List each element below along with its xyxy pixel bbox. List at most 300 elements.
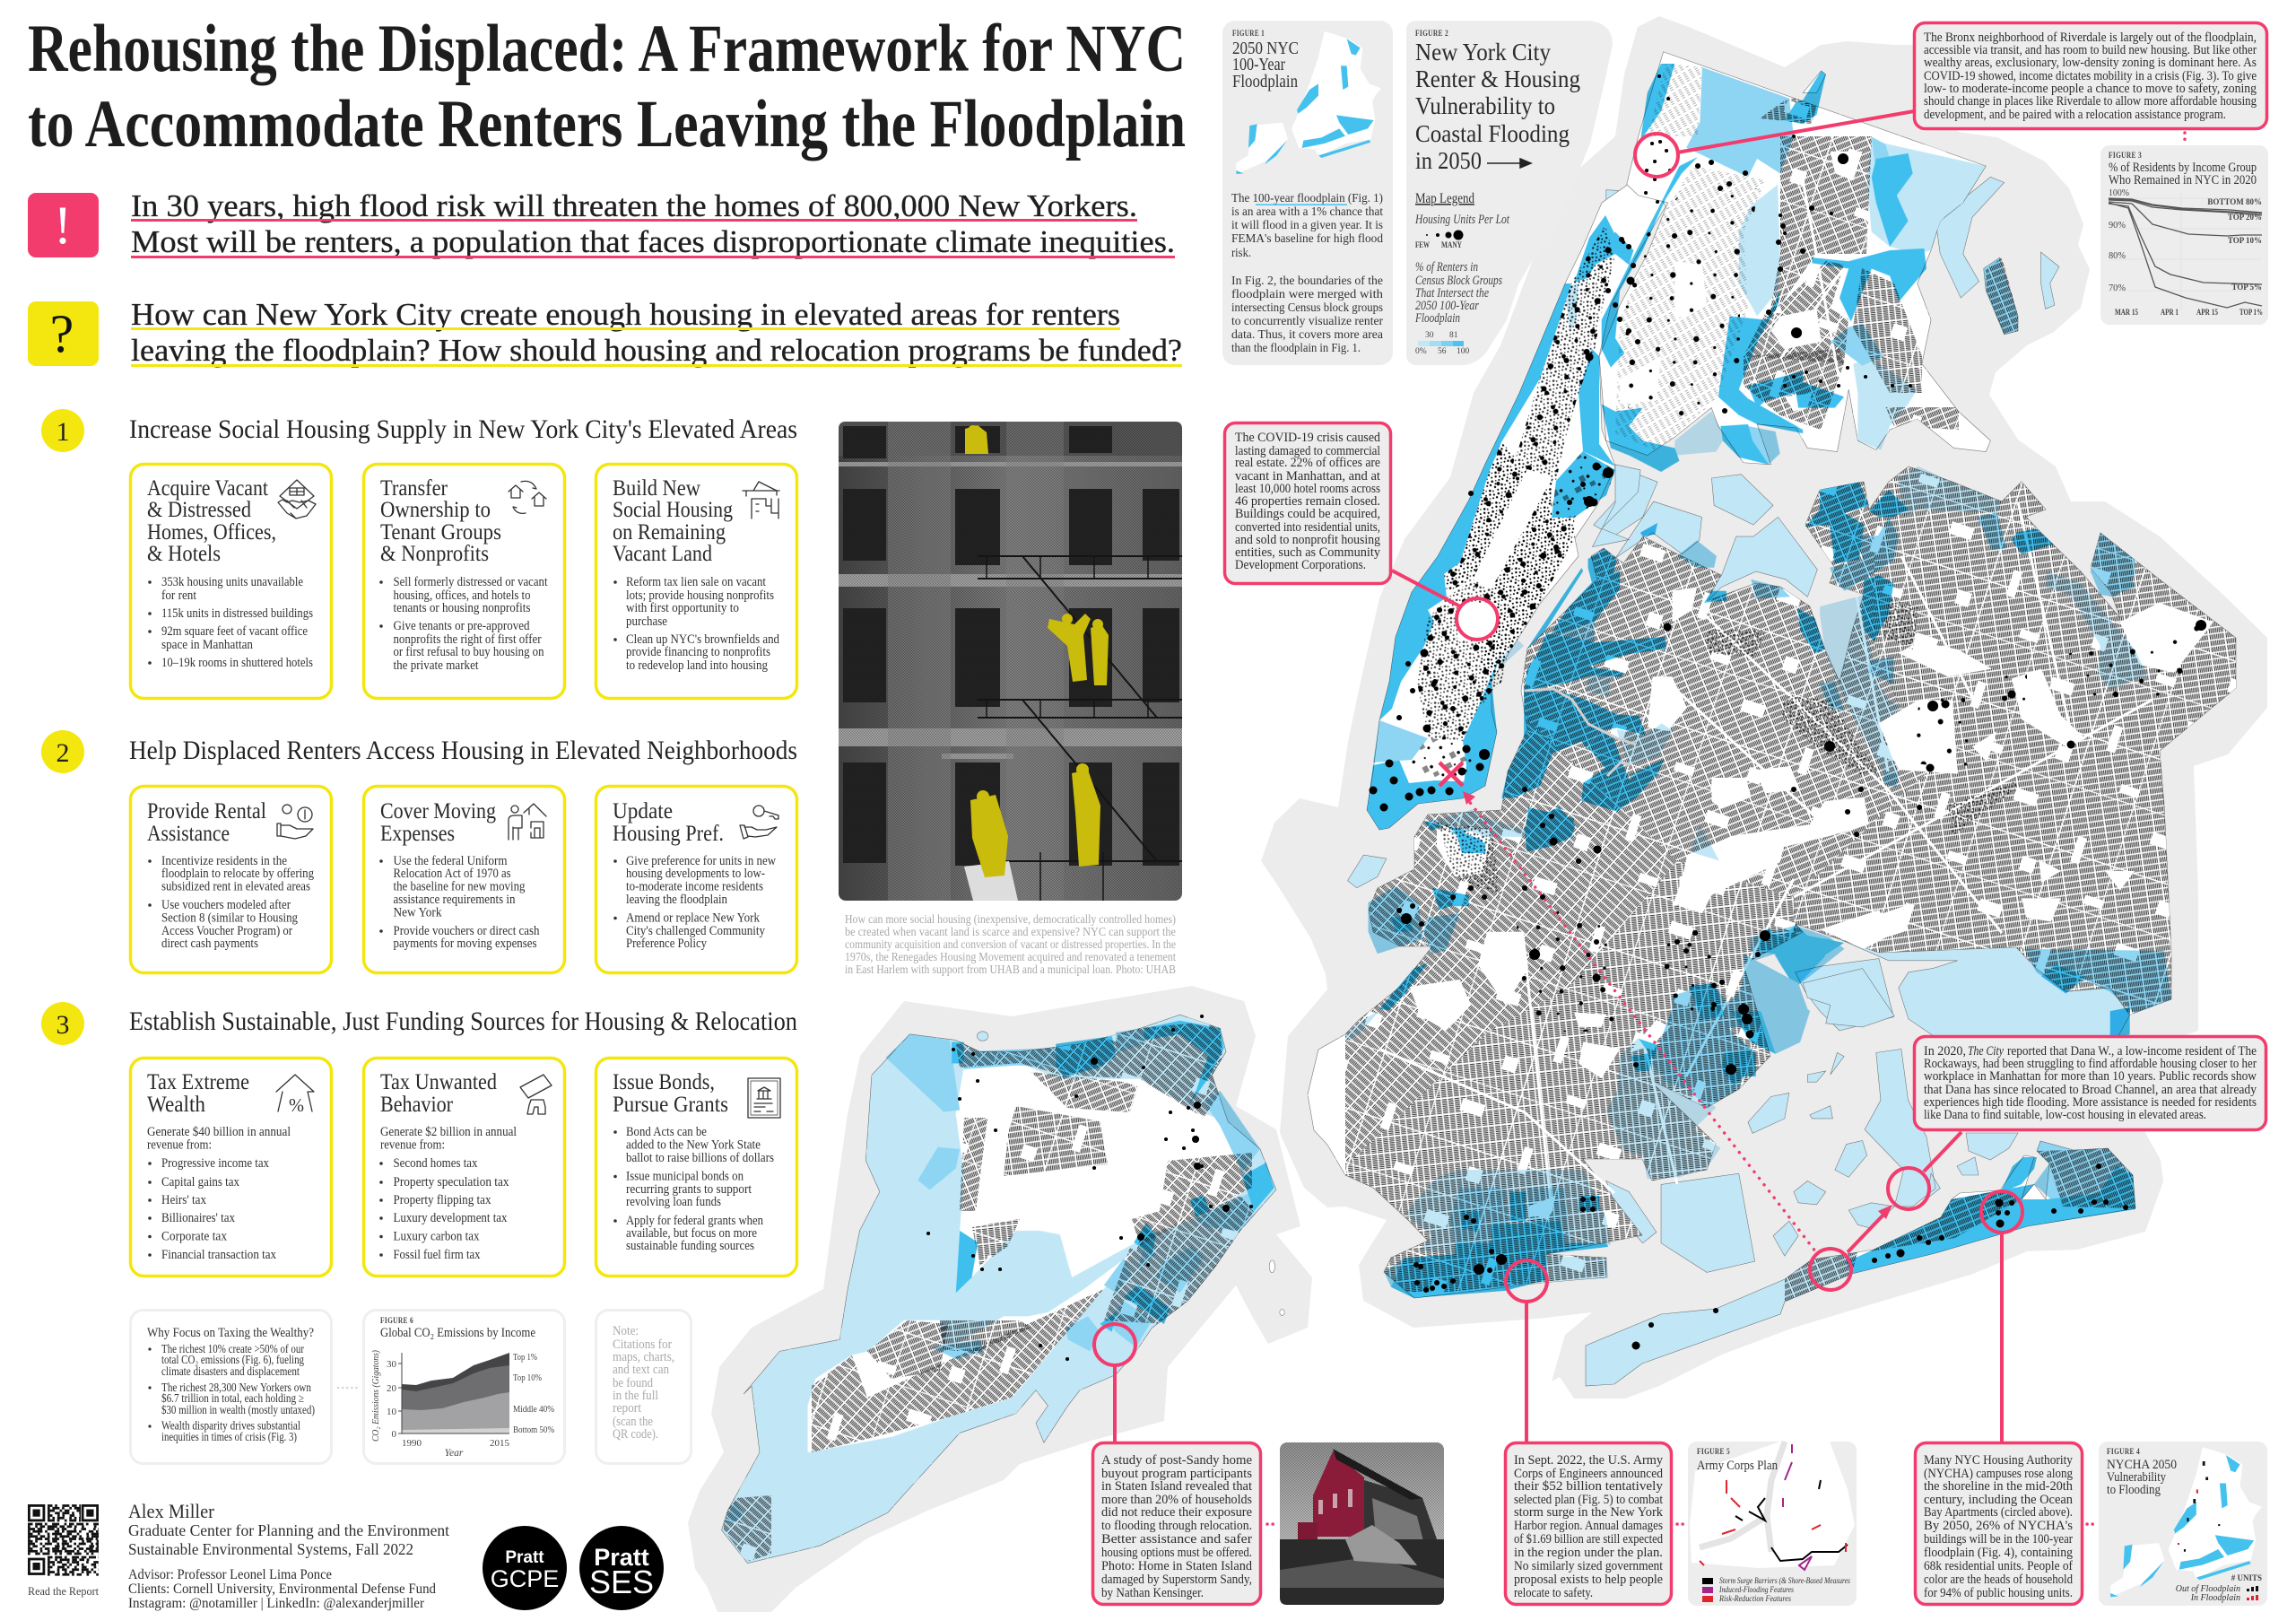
- icon: exchanging houses: [509, 481, 546, 513]
- callout: covid commercial real estate: and sold to nonprofit housing: [1235, 533, 1380, 547]
- icon: percent arrow: [276, 1075, 314, 1111]
- map legend: 30: [1425, 331, 1434, 340]
- callout: Army Corps plan: selected plan (Fig. 5) to combat: [1514, 1493, 1664, 1507]
- callout: NYCHA campuses: color are the heads of household: [1924, 1573, 2073, 1587]
- callout: Staten Island buyout: by Nathan Kensinger.: [1101, 1586, 1204, 1600]
- panel: figure 1 floodplain: 2050 NYC: [1232, 39, 1299, 58]
- map legend: 0%: [1415, 347, 1427, 356]
- callout: Army Corps plan: [1505, 1442, 1672, 1604]
- line chart: BOTTOM 80%: [2207, 197, 2262, 206]
- panel: figure 4 NYCHA: Vulnerability: [2107, 1470, 2166, 1485]
- area chart: 10: [387, 1407, 396, 1417]
- panel: why tax the wealthy: Wealth disparity drives substantial: [161, 1419, 300, 1432]
- riverdale marker and connector: [1635, 111, 1914, 177]
- map: building block texture: [718, 64, 2242, 1570]
- panel: figure 5 Army Corps plan: Risk-Reduction Features: [1718, 1595, 1791, 1604]
- section 3 heading: Establish Sustainable, Just Funding Sources for Housing & Relocation: [129, 1006, 797, 1036]
- card: tax unwanted behavior: Tax Unwanted: [380, 1070, 497, 1094]
- logo: Pratt GCPE: Pratt: [505, 1548, 544, 1567]
- callout: NYCHA campuses: By 2050, 26% of NYCHA's: [1924, 1519, 2073, 1533]
- panel: figure 1 floodplain: risk.: [1231, 246, 1251, 259]
- area chart: Middle 40%: [513, 1405, 554, 1415]
- statement: research question: How can New York City create enough housing in elevated areas for renters: [131, 297, 1120, 332]
- map legend: Floodplain: [1414, 311, 1460, 326]
- connector dots to figure 3: [2183, 133, 2187, 142]
- card: housing preference: Preference Policy: [626, 937, 708, 951]
- card: build new social housing: on Remaining: [613, 520, 726, 545]
- callout: NYCHA campuses: Many NYC Housing Authority: [1924, 1453, 2073, 1468]
- icon: exclamation badge: [28, 193, 99, 257]
- Staten Island flood shading: [722, 1015, 1276, 1564]
- card: tax extreme wealth: [131, 1059, 332, 1276]
- panel: figure 1 floodplain: Floodplain: [1232, 72, 1298, 91]
- title: Rehousing the Displaced: A Framework for NYC: [28, 12, 1186, 86]
- map legend: That Intersect the: [1415, 286, 1489, 301]
- card: acquire vacant: & Distressed: [147, 498, 251, 522]
- card: bonds and grants: Issue municipal bonds on: [626, 1170, 744, 1184]
- card: housing preference: Give preference for units in new: [626, 854, 776, 868]
- icon: crane and building: [743, 482, 779, 518]
- callout: Army Corps plan: No similarly sized government: [1514, 1559, 1664, 1573]
- card: housing preference: City's challenged Community: [626, 924, 766, 938]
- card: build new social housing: to redevelop land into housing: [626, 658, 768, 673]
- panel: figure 4 NYCHA: NYCHA 2050: [2107, 1458, 2177, 1472]
- map: parks and roads: [1381, 152, 2213, 1217]
- panel: figure 1 floodplain: floodplain were merged with: [1231, 287, 1383, 301]
- card: tax extreme wealth: Corporate tax: [161, 1229, 228, 1243]
- author credits: Advisor: Professor Leonel Lima Ponce: [128, 1567, 332, 1582]
- callout: Army Corps plan: In Sept. 2022, the U.S. Army: [1514, 1453, 1663, 1468]
- south Brooklyn flood shading: [1345, 807, 1844, 1298]
- panel: figure 2 title and legend: FIGURE 2: [1415, 29, 1448, 38]
- Rockaway markers and connectors: [1810, 1132, 2022, 1442]
- card: rental assistance: Provide Rental: [147, 799, 266, 823]
- map legend: 56: [1438, 347, 1447, 356]
- area chart: Top 10%: [513, 1373, 542, 1383]
- callout: Army Corps plan: their $52 billion tentatively: [1514, 1479, 1664, 1494]
- author credits: Alex Miller: [128, 1500, 215, 1522]
- card: bonds and grants: Pursue Grants: [613, 1093, 728, 1117]
- photo caption: in East Harlem with support from UHAB and a municipal loan. Photo: UHAB: [845, 963, 1176, 976]
- callout: covid commercial real estate: The COVID-19 crisis caused: [1235, 431, 1380, 445]
- panel: figure 1 floodplain: than the floodplain in Fig. 1.: [1231, 341, 1361, 354]
- card: housing preference: to-moderate income residents: [626, 879, 763, 893]
- callout: Staten Island buyout: more than 20% of households: [1101, 1493, 1252, 1507]
- callout: NYCHA campuses: 68k residential units. People of: [1924, 1559, 2073, 1573]
- workplace X marker: [1439, 762, 1463, 786]
- card: acquire vacant: & Hotels: [147, 542, 221, 566]
- callout: NYCHA campuses: century, including the Ocean: [1924, 1493, 2073, 1507]
- card: tax extreme wealth: %: [289, 1094, 304, 1116]
- card: transfer ownership: tenants or housing nonprofits: [393, 601, 531, 615]
- callout: NYCHA campuses: (NYCHA) campuses rose along: [1924, 1467, 2073, 1481]
- callout: Dana W. Rockaways: like Dana to find suitable, low-cost housing in elevated areas.: [1924, 1108, 2206, 1122]
- panel: figure 5 Army Corps plan: Army Corps Plan: [1697, 1459, 1778, 1473]
- callout: covid commercial real estate: converted into residential units,: [1235, 520, 1380, 535]
- card: moving expenses: New York: [393, 906, 442, 920]
- card: acquire vacant: [131, 465, 332, 698]
- card: moving expenses: Expenses: [380, 822, 455, 846]
- card: rental assistance: Section 8 (similar to Housing: [161, 911, 298, 926]
- line chart: TOP 10%: [2228, 236, 2262, 245]
- card: tax unwanted behavior: Property speculation tax: [393, 1175, 509, 1189]
- photo caption: How can more social housing (inexpensive, democratically controlled homes): [845, 912, 1176, 926]
- icon: person moving into house: [509, 804, 546, 840]
- line chart: 100%: [2109, 187, 2129, 198]
- section 2 badge: [41, 730, 84, 773]
- Bronx flood shading: [1565, 64, 2018, 472]
- callout: NYCHA campuses: floodplain (Fig. 4), containing: [1924, 1546, 2073, 1560]
- Coney Island marker and connector: [1506, 1260, 1547, 1442]
- panel: why tax the wealthy: climate disasters and displacement: [161, 1364, 300, 1378]
- card: tax unwanted behavior: Luxury development tax: [393, 1211, 508, 1225]
- card: build new social housing: lots; provide housing nonprofits: [626, 588, 774, 603]
- panel: why tax the wealthy: [131, 1310, 332, 1464]
- panel: citation note: in the full: [613, 1389, 658, 1403]
- callout: Staten Island buyout: housing options must be offered.: [1101, 1546, 1252, 1560]
- callout: Army Corps plan: of $1.69 billion are still expected: [1514, 1532, 1663, 1547]
- card: acquire vacant: Acquire Vacant: [147, 476, 268, 501]
- card: build new social housing: Reform tax lien sale on vacant: [626, 575, 766, 589]
- map legend: MANY: [1441, 240, 1462, 249]
- panel: figure 5 Army Corps plan: Storm Surge Barriers (& Shore-Based Measures: [1719, 1576, 1850, 1586]
- card: build new social housing: with first opportunity to: [626, 601, 739, 615]
- callout: Army Corps plan: Harbor region. Annual damages: [1514, 1519, 1663, 1533]
- map legend: Map Legend: [1415, 191, 1474, 206]
- card: bonds and grants: ballot to raise billions of dollars: [626, 1151, 774, 1165]
- callout: Army Corps plan: storm surge in the New York: [1514, 1505, 1663, 1520]
- card: tax unwanted behavior: Property flipping tax: [393, 1193, 491, 1207]
- statement: research question: [131, 297, 1182, 368]
- panel: why tax the wealthy: inequities in times of crisis (Fig. 3): [161, 1430, 297, 1443]
- callout: Staten Island buyout: Photo: Home in Staten Island: [1101, 1559, 1252, 1573]
- dotted relocation route: [1463, 791, 1816, 1252]
- QR code: [28, 1505, 99, 1574]
- panel: citation note: be found: [613, 1376, 653, 1390]
- statement: flood risk: Most will be renters, a population that faces disproportionate climate inequities.: [131, 224, 1175, 259]
- map: light islands and shallow flood areas: [1348, 177, 2130, 1272]
- panel: citation note: [596, 1310, 691, 1464]
- panel: why tax the wealthy: total CO₂ emissions (Fig. 6), fueling: [161, 1353, 304, 1366]
- callout: Dana W. Rockaways: reported that Dana W., a low-income resident of The: [2007, 1044, 2257, 1059]
- section 1 heading: Increase Social Housing Supply in New York City's Elevated Areas: [129, 414, 797, 444]
- panel: figure 3 chart: Who Remained in NYC in 2020: [2109, 173, 2257, 187]
- section 3 badge: 3: [56, 1010, 70, 1040]
- line chart: 90%: [2109, 220, 2126, 231]
- card: tax unwanted behavior: Generate $2 billion in annual: [380, 1125, 517, 1139]
- card: transfer ownership: Give tenants or pre-approved: [393, 619, 530, 633]
- midtown marker and connector: [1392, 571, 1498, 640]
- card: rental assistance: Incentivize residents in the: [161, 854, 287, 868]
- card: acquire vacant: Homes, Offices,: [147, 520, 276, 545]
- card: transfer ownership: the private market: [393, 658, 479, 673]
- author credits: Graduate Center for Planning and the Environment: [128, 1521, 449, 1539]
- logo: Pratt GCPE: GCPE: [491, 1565, 559, 1592]
- panel: figure 5 Army Corps plan: FIGURE 5: [1697, 1447, 1730, 1456]
- area chart: 20: [387, 1383, 396, 1394]
- panel: figure 1 floodplain: The 100-year floodplain (Fig. 1): [1231, 191, 1383, 205]
- panel: figure 2 title and legend: Renter & Housing: [1415, 65, 1580, 92]
- card: transfer ownership: housing, offices, and hotels to: [393, 588, 531, 603]
- area chart: [370, 1350, 554, 1459]
- card: rental assistance: Assistance: [147, 822, 230, 846]
- card: tax unwanted behavior: Luxury carbon tax: [393, 1229, 480, 1243]
- card: bonds and grants: revolving loan funds: [626, 1195, 721, 1209]
- panel: figure 1 floodplain: FEMA's baseline for high flood: [1231, 231, 1383, 245]
- section 2 badge: 2: [56, 738, 70, 768]
- callout: covid commercial real estate: Development Corporations.: [1235, 558, 1366, 572]
- panel: figure 4 NYCHA: FIGURE 4: [2107, 1447, 2140, 1456]
- card: bonds and grants: Bond Acts can be: [626, 1125, 707, 1139]
- card: bonds and grants: [596, 1059, 796, 1276]
- line chart: TOP 1%: [2239, 308, 2263, 317]
- callout: NYCHA campuses: for 94% of public housing units.: [1924, 1586, 2073, 1600]
- card: moving expenses: Cover Moving: [380, 799, 496, 823]
- callout: covid commercial real estate: real estate. 22% of offices are: [1235, 456, 1380, 470]
- card: housing preference: housing developments to low-: [626, 867, 765, 881]
- card: transfer ownership: or first refusal to buy housing on: [393, 645, 544, 659]
- callout: covid commercial real estate: Buildings could be acquired,: [1235, 507, 1380, 521]
- icon: house and handshake: [278, 480, 316, 518]
- photo caption: be created when vacant land is scarce and expensive? NYC can support the: [845, 925, 1176, 938]
- panel: figure 4 NYCHA: # UNITS: [2231, 1573, 2262, 1582]
- map legend: 81: [1449, 331, 1458, 340]
- callout: Dana W. Rockaways: workplace in Manhattan for more than 10 years. Public records show: [1924, 1069, 2257, 1084]
- panel: figure 1 floodplain: In Fig. 2, the boundaries of the: [1231, 274, 1383, 287]
- card: tax extreme wealth: Progressive income tax: [161, 1156, 270, 1171]
- card: acquire vacant: for rent: [161, 588, 196, 603]
- card: acquire vacant: 10–19k rooms in shuttered hotels: [161, 656, 313, 670]
- panel: figure 6 emissions chart: Global CO₂ Emissions by Income: [380, 1326, 535, 1340]
- connector dots to house photo: [1267, 1522, 1276, 1526]
- card: moving expenses: the baseline for new moving: [393, 879, 526, 893]
- panel: citation note: maps, charts,: [613, 1350, 674, 1364]
- card: acquire vacant: 115k units in distressed buildings: [161, 606, 313, 621]
- callout: Staten Island buyout: did not reduce their exposure: [1101, 1505, 1252, 1520]
- line chart: TOP 20%: [2228, 213, 2262, 222]
- panel: citation note: and text can: [613, 1363, 669, 1377]
- area chart: 2015: [490, 1438, 509, 1449]
- icon: question badge: ?: [50, 304, 74, 363]
- line chart: APR 1: [2161, 308, 2179, 317]
- card: bonds and grants: recurring grants to support: [626, 1182, 752, 1197]
- callout: covid commercial real estate: [1225, 423, 1390, 583]
- icon: bond certificate: [748, 1078, 780, 1118]
- card: moving expenses: assistance requirements in: [393, 893, 516, 907]
- area chart: Year: [445, 1448, 464, 1459]
- panel: figure 1 floodplain: is an area with a 1% chance that: [1231, 205, 1383, 218]
- card: rental assistance: subsidized rent in elevated areas: [161, 879, 310, 893]
- card: transfer ownership: Sell formerly distressed or vacant: [393, 575, 547, 589]
- map legend: Census Block Groups: [1415, 274, 1502, 288]
- card: tax extreme wealth: Capital gains tax: [161, 1175, 240, 1189]
- icon: figure carrying tax block: [520, 1075, 552, 1114]
- card: transfer ownership: Tenant Groups: [380, 520, 501, 545]
- card: tax extreme wealth: Wealth: [147, 1093, 205, 1117]
- panel: figure 3 chart: FIGURE 3: [2109, 151, 2142, 160]
- callout: covid commercial real estate: lasting damaged to commercial: [1235, 444, 1380, 458]
- section 1 badge: [41, 409, 84, 452]
- Rockaway blocks: [1785, 1148, 2135, 1302]
- callout: Staten Island buyout: buyout program participants: [1101, 1467, 1252, 1481]
- callout: NYCHA campuses: [1916, 1442, 2083, 1604]
- area chart: CO₂ Emissions (Gigatons): [370, 1350, 381, 1442]
- card: tax extreme wealth: Heirs' tax: [161, 1193, 207, 1207]
- section 3 badge: [41, 1002, 84, 1045]
- panel: citation note: (scan the: [613, 1415, 653, 1429]
- panel: figure 3 chart: [2100, 145, 2268, 325]
- callout: Staten Island buyout: [1092, 1442, 1261, 1604]
- card: transfer ownership: Transfer: [380, 476, 448, 501]
- icon: exclamation badge: !: [54, 196, 72, 255]
- Queens flood shading: [1618, 466, 2171, 1076]
- card: transfer ownership: [364, 465, 565, 698]
- QR caption: Read the Report: [28, 1584, 99, 1598]
- map: waterway lines: [1525, 689, 1636, 776]
- map: halo: [688, 16, 2267, 1612]
- card: build new social housing: Vacant Land: [613, 542, 712, 566]
- icon: coins over hand: [277, 805, 313, 839]
- callout: covid commercial real estate: 46 properties remain closed.: [1235, 494, 1380, 509]
- card: rental assistance: Use vouchers modeled after: [161, 898, 291, 912]
- connector dots to figure 4: [2087, 1522, 2096, 1526]
- card: build new social housing: Clean up NYC's brownfields and: [626, 632, 780, 647]
- statement: flood risk: [131, 188, 1175, 259]
- card: tax unwanted behavior: Fossil fuel firm tax: [393, 1248, 481, 1262]
- Manhattan flood shading: [1367, 215, 1615, 830]
- callout: Army Corps plan: in the region under the plan.: [1514, 1546, 1663, 1560]
- statement: research question: leaving the floodplain? How should housing and relocation programs be funded?: [131, 333, 1182, 368]
- map legend: [1414, 191, 1510, 356]
- callout: riverdale: development, and be paired with a relocation assistance program.: [1924, 108, 2226, 122]
- card: build new social housing: purchase: [626, 614, 667, 629]
- card: tax unwanted behavior: revenue from:: [380, 1138, 445, 1153]
- card: rental assistance: floodplain to relocate by offering: [161, 867, 314, 881]
- icon: question badge: [28, 301, 99, 366]
- card: bonds and grants: Issue Bonds,: [613, 1070, 715, 1094]
- panel: figure 2 title and legend: in 2050: [1415, 147, 1482, 174]
- card: build new social housing: Build New: [613, 476, 700, 501]
- card: bonds and grants: sustainable funding sources: [626, 1239, 754, 1253]
- card: transfer ownership: & Nonprofits: [380, 542, 489, 566]
- callout: Dana W. Rockaways: The City: [1968, 1044, 2004, 1059]
- connector dots to figure 6: [338, 1387, 359, 1389]
- Bronx blocks: [1744, 90, 1973, 440]
- card: build new social housing: [596, 465, 796, 698]
- panel: figure 2 title and legend: Coastal Flooding: [1415, 120, 1570, 147]
- card: tax extreme wealth: Billionaires' tax: [161, 1211, 236, 1225]
- map legend: Housing Units Per Lot: [1414, 213, 1510, 227]
- author credits: [128, 1500, 449, 1611]
- Rockaway flood shading: [1586, 1141, 2135, 1386]
- panel: figure 3 chart: % of Residents by Income Group: [2109, 161, 2257, 175]
- area chart: Top 1%: [513, 1353, 537, 1363]
- card: tax extreme wealth: Generate $40 billion in annual: [147, 1125, 291, 1139]
- panel: why tax the wealthy: The richest 10% create >50% of our: [161, 1342, 304, 1355]
- panel: figure 5 Army Corps plan: Induced-Flooding Features: [1718, 1586, 1794, 1595]
- callout: Staten Island buyout: damaged by Superstorm Sandy,: [1101, 1573, 1252, 1587]
- card: rental assistance: direct cash payments: [161, 937, 258, 951]
- map legend: FEW: [1415, 240, 1430, 249]
- logo: Pratt GCPE: [483, 1526, 567, 1610]
- panel: figure 2 title and legend: New York City: [1415, 39, 1551, 65]
- card: bonds and grants: available, but focus on more: [626, 1226, 757, 1241]
- callout: covid commercial real estate: vacant in Manhattan, and at: [1235, 469, 1381, 484]
- area chart: 1990: [402, 1438, 422, 1449]
- card: rental assistance: [131, 786, 332, 972]
- card: tax unwanted behavior: Behavior: [380, 1093, 454, 1117]
- panel: figure 1 floodplain: intersecting Census block groups: [1231, 301, 1383, 314]
- callout: NYCHA campuses: Bay Apartments (circled above).: [1924, 1505, 2073, 1520]
- map legend: 2050 100-Year: [1415, 299, 1479, 313]
- arrow: [1487, 159, 1531, 168]
- panel: citation note: Note:: [613, 1324, 639, 1338]
- card: tax extreme wealth: revenue from:: [147, 1138, 212, 1153]
- line chart: MAR 15: [2115, 308, 2138, 317]
- callout: Dana W. Rockaways: In 2020,: [1924, 1044, 1966, 1059]
- photo caption: 1970s, the Renegades Housing Movement acquired and renovated a tenement: [845, 950, 1176, 963]
- panel: why tax the wealthy: The richest 28,300 New Yorkers own: [161, 1381, 311, 1394]
- panel: figure 1 floodplain: FIGURE 1: [1232, 29, 1265, 38]
- title: to Accommodate Renters Leaving the Floodplain: [28, 87, 1186, 161]
- mini map: NYCHA: [2110, 1447, 2262, 1597]
- card: moving expenses: Relocation Act of 1970 as: [393, 867, 511, 881]
- panel: why tax the wealthy: Why Focus on Taxing the Wealthy?: [147, 1326, 314, 1340]
- panel: why tax the wealthy: $6.7 trillion in total, each holding ≥: [161, 1391, 304, 1405]
- map legend: % of Renters in: [1415, 260, 1478, 274]
- card: housing preference: leaving the floodplain: [626, 893, 728, 907]
- callout: Army Corps plan: proposal exists to help people: [1514, 1573, 1663, 1587]
- callout: Staten Island buyout: Better assistance and safer: [1101, 1532, 1252, 1547]
- callout: Dana W. Rockaways: experiences high tide flooding. More assistance is needed for residents: [1924, 1095, 2257, 1110]
- panel: figure 4 NYCHA: to Flooding: [2107, 1483, 2161, 1497]
- panel: why tax the wealthy: $30 million in wealth (mostly untaxed): [161, 1403, 315, 1416]
- title: [28, 12, 1186, 161]
- photo caption: [845, 912, 1176, 976]
- panel: figure 6 emissions chart: [364, 1310, 565, 1464]
- card: tax extreme wealth: Financial transaction tax: [161, 1248, 277, 1262]
- map: flood vulnerability shading: [722, 64, 2171, 1564]
- card: housing preference: Amend or replace New York: [626, 911, 761, 926]
- panel: figure 2 title and legend: Vulnerability to: [1415, 92, 1555, 119]
- card: transfer ownership: nonprofits the right of first offer: [393, 632, 542, 647]
- card: tax unwanted behavior: [364, 1059, 565, 1276]
- card: acquire vacant: 92m square feet of vacant office: [161, 624, 308, 639]
- card: housing preference: Housing Pref.: [613, 822, 724, 846]
- panel: figure 4 NYCHA: Out of Floodplain: [2176, 1584, 2240, 1594]
- callout: NYCHA campuses: buildings will be in the 100-year: [1924, 1532, 2073, 1547]
- line chart: 70%: [2109, 283, 2126, 293]
- callout: covid commercial real estate: least 10,000 hotel rooms across: [1235, 482, 1380, 496]
- panel: figure 5 Army Corps plan: [1688, 1442, 1857, 1606]
- card: bonds and grants: Apply for federal grants when: [626, 1214, 764, 1228]
- callout: Dana W. Rockaways: [1914, 1037, 2266, 1130]
- card: transfer ownership: Ownership to: [380, 498, 491, 522]
- panel: citation note: report: [613, 1401, 642, 1416]
- area chart: Bottom 50%: [513, 1425, 554, 1435]
- card: moving expenses: Provide vouchers or direct cash: [393, 924, 540, 938]
- callout: riverdale: low- to moderate-income people a chance to move to safety, zoning: [1924, 82, 2257, 96]
- panel: figure 1 floodplain: it will flood in a given year. It is: [1231, 218, 1383, 231]
- callout: riverdale: wealthy areas, exclusionary, low-density zoning is dominant here. As: [1924, 56, 2257, 70]
- card: moving expenses: payments for moving expenses: [393, 937, 537, 951]
- card: tax extreme wealth: Tax Extreme: [147, 1070, 249, 1094]
- card: tax unwanted behavior: Second homes tax: [393, 1156, 478, 1171]
- callout: riverdale: The Bronx neighborhood of Riverdale is largely out of the floodplain,: [1924, 30, 2257, 45]
- callout: covid commercial real estate: entities, such as Community: [1235, 545, 1380, 560]
- icon: key over hand: [740, 806, 778, 839]
- card: housing preference: [596, 786, 796, 972]
